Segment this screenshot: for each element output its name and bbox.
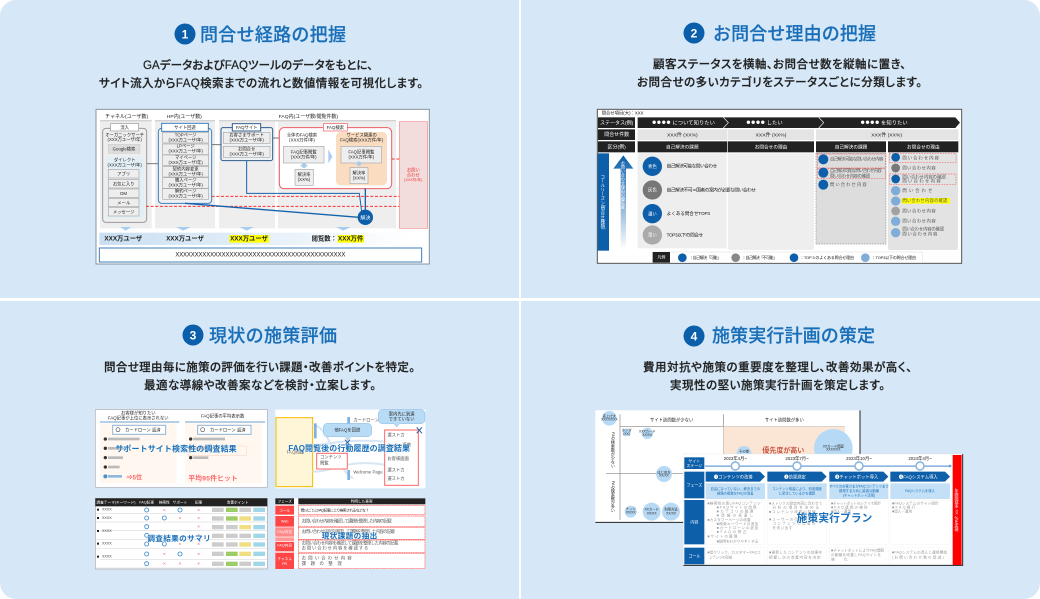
thumbnail: priority matrix: 利用方法: [664, 507, 678, 512]
thumbnail: priority matrix: XXXカード: [639, 428, 656, 433]
status matrix thumbnail: お問合せの理由: [907, 144, 940, 151]
thumbnail: action plan: ■検索性の高いFAQコンテンツ: [707, 500, 761, 505]
flow diagram thumbnail: 解決率: [298, 171, 311, 178]
flow diagram thumbnail: TOPページ: [175, 132, 197, 137]
status matrix thumbnail: XXX件 (XX%): [756, 131, 787, 138]
status matrix thumbnail: XXX件 (XX%): [667, 131, 698, 138]
status matrix thumbnail: 凡例: [657, 254, 665, 260]
status matrix thumbnail: 問合せ件数: [604, 131, 629, 138]
thumbnail: action plan: 2023年4月~: [724, 455, 747, 462]
status matrix thumbnail: コールリーズン(問合せ種類): [600, 174, 606, 230]
status matrix thumbnail: ：TOP 3 のよくある問合せ理由: [800, 254, 854, 260]
thumbnail: support site search survey: 平均95件ヒット: [188, 473, 238, 482]
flow diagram thumbnail: (XXX万ユーザ/年): [230, 137, 264, 144]
status matrix thumbnail: 問い合わせ: [902, 187, 932, 194]
flow diagram thumbnail: (XXX万件/年): [348, 153, 375, 160]
thumbnail: survey summary: 記事: [195, 500, 203, 505]
thumbnail: issue extraction: ゴール: [279, 507, 290, 512]
thumbnail: survey summary: XXXX: [102, 542, 112, 546]
thumbnail: issue extraction: FAQ内容: [277, 542, 292, 547]
status matrix thumbnail: 自己解決可能な問い合わせ内容: [830, 156, 884, 163]
thumbnail: survey summary: 調査結果のサマリ: [147, 533, 211, 543]
description 4: 実現性の堅い施策実行計画を策定します。: [670, 378, 885, 392]
status matrix thumbnail: 濃い: [648, 210, 657, 217]
status matrix thumbnail: 問い合わせ内容: [902, 230, 938, 237]
thumbnail: support site search survey: お客様が知りたい: [121, 409, 156, 416]
flow diagram thumbnail: LPページ: [177, 144, 195, 149]
thumbnail: support site search survey: カードローン 返済: [210, 426, 246, 433]
thumbnail: survey summary: 改善ポイント: [227, 500, 249, 505]
thumbnail: action plan: 把握し次の改善内容を決定: [769, 554, 821, 559]
thumbnail: survey summary: FAQ記事: [139, 500, 154, 505]
flow diagram thumbnail: (XXX件/年): [404, 177, 422, 182]
status matrix thumbnail: お問い合わせ理由の優先度: [621, 160, 626, 209]
thumbnail: behavior history survey: お客様画面: [387, 455, 410, 462]
flow diagram thumbnail: 流入: [120, 124, 130, 131]
description 1: サイト流入からFAQ検索までの流れと数値情報を可視化します。: [99, 76, 423, 90]
thumbnail: survey summary: ×: [179, 561, 182, 566]
status matrix thumbnail: 問い合わせ内容の確認: [902, 173, 946, 180]
flow diagram thumbnail: チャネル(ユーザ数): [105, 113, 149, 120]
thumbnail: action plan: 内容: [690, 519, 698, 525]
thumbnail: survey summary: サポート: [173, 500, 188, 505]
thumbnail: action plan: ■説明をわかりやすくする: [717, 538, 759, 543]
thumbnail: action plan: ■導入・運用: [831, 508, 851, 513]
flow diagram thumbnail: 解決: [360, 214, 370, 221]
thumbnail: priority matrix: XX/XX: [666, 511, 677, 515]
thumbnail: support site search survey: FAQ記事の平均表示数: [201, 412, 245, 419]
flow diagram thumbnail: ダイレクト: [114, 156, 135, 163]
thumbnail: action plan: ■更新したコンテンツの効果を: [769, 550, 823, 555]
status matrix thumbnail: 問い合わせ内容: [902, 164, 936, 171]
status matrix thumbnail: ●●●● を知りたい: [860, 118, 908, 127]
thumbnail: action plan: に変化しているかを確認: [779, 491, 816, 496]
thumbnail: action plan: ❶コンテンツの改善: [714, 473, 753, 480]
description 3: 最適な導線や改善案などを検討・立案します。: [144, 378, 376, 392]
heading 4: 4: [691, 330, 698, 344]
thumbnail: action plan: 施策実行プラン: [797, 512, 873, 525]
thumbnail: action plan: 2023年7月~: [785, 455, 809, 462]
flow diagram thumbnail: サイト回遊: [174, 124, 196, 131]
description 3: 問合せ理由毎に施策の評価を行い課題・改善ポイントを特定。: [104, 360, 415, 374]
status matrix thumbnail: ：自己解決「不可能」: [742, 254, 777, 260]
flow diagram thumbnail: (XXX万ユーザ/年): [230, 151, 264, 158]
thumbnail: action plan: ■FAQシステムのサイト設計: [892, 500, 939, 505]
status matrix thumbnail: ●●●● について知りたい: [652, 118, 715, 127]
status matrix thumbnail: 問い合わせ内容: [902, 218, 936, 225]
thumbnail: action plan: ❸チャットボット導入: [835, 473, 879, 480]
flow diagram thumbnail: お気に入り: [113, 180, 134, 187]
flow diagram thumbnail: Google検索: [113, 145, 136, 152]
thumbnail: issue extraction: お問い合わせ内容: [302, 555, 352, 562]
thumbnail: survey summary: ×: [197, 507, 200, 512]
thumbnail: action plan: ■カテゴリの整理: [717, 508, 754, 513]
thumbnail: action plan: コンテンツの改善点: [772, 520, 816, 525]
thumbnail: action plan: ■検索キーワードの追加: [717, 521, 759, 526]
flow diagram thumbnail: 合わせ: [407, 171, 420, 178]
flow diagram thumbnail: XXX万ユーザ: [230, 234, 269, 243]
flow diagram thumbnail: XXX万件: [338, 234, 364, 243]
thumbnail: priority matrix: サイト訪問数が少ない: [650, 417, 693, 424]
status matrix thumbnail: XXX件 (XX%): [871, 131, 902, 138]
thumbnail: action plan: [683, 454, 963, 565]
status matrix thumbnail: ：TOP3以下の問合せ理由: [872, 254, 916, 260]
flow diagram thumbnail: FAQ記事閲覧: [291, 148, 317, 155]
thumbnail: action plan: ■カスタマーページの改善: [707, 517, 751, 522]
description 4: [643, 360, 912, 392]
status matrix thumbnail: 問い合わせ内容の確認: [902, 226, 945, 233]
thumbnail: priority matrix: XX/XX: [642, 433, 653, 437]
status matrix thumbnail: TOP3以下の問合せ: [667, 232, 704, 239]
thumbnail: action plan: ❹FAQシステム導入: [899, 473, 938, 480]
thumbnail: behavior history survey: FAQ閲覧後の行動履歴の調査結果: [288, 443, 410, 453]
status matrix thumbnail: 薄い: [648, 232, 657, 238]
flow diagram thumbnail: HP内(ユーザ数): [167, 113, 202, 120]
thumbnail: action plan: ステージ: [686, 462, 702, 468]
flow diagram thumbnail: お問合せ: [238, 146, 255, 153]
flow diagram thumbnail: (XX%): [353, 175, 366, 180]
thumbnail: survey summary: ×: [197, 561, 200, 566]
flow diagram thumbnail: 解約ページ: [175, 188, 197, 195]
thumbnail: priority matrix: その他: [739, 448, 750, 453]
status matrix thumbnail: 自己解決可能な問い合わせ: [667, 163, 718, 170]
status matrix thumbnail: お問合せの理由: [755, 144, 788, 151]
thumbnail: behavior history survey: 遷ストカ: [387, 475, 405, 482]
panel 1: inquiry routes: [96, 24, 429, 264]
flow diagram thumbnail: (XXX万ユーザ/年): [169, 148, 203, 155]
thumbnail: behavior history survey: FAQ閲覧: [287, 449, 305, 456]
flow diagram thumbnail: FAQ内(ユーザ数/閲覧件数): [279, 113, 338, 120]
thumbnail: action plan: すべてのお客さまがFAQコンテンツまで: [829, 484, 889, 489]
thumbnail: issue extraction: 判明した事実: [351, 499, 373, 504]
flow diagram thumbnail: XXXXXXXXXXXXXXXXXXXXXXXXXXXXXXXXXXXXXXXXXXXX: [175, 253, 345, 259]
thumbnail: survey summary: 検索性: [159, 500, 170, 505]
flow diagram thumbnail: XXX万ユーザ: [104, 234, 143, 243]
thumbnail: action plan: 2024年4月~: [908, 455, 932, 462]
flow diagram thumbnail: FAQ検索: [327, 124, 345, 131]
plan thumbnails: [595, 410, 963, 565]
thumbnail: action plan: 誘導するために最適な動線: [839, 488, 880, 493]
thumbnail: issue extraction: お問い合わせ内容を確認して課題を整理した内容の記載: [302, 528, 396, 535]
description 2: お問合せの多いカテゴリをステータスごとに分類します。: [637, 75, 922, 89]
panel 3: current measures evaluation: [95, 324, 425, 569]
thumbnail: support site search survey: サポートサイト検索性の調査結果: [115, 444, 237, 454]
flow diagram thumbnail: アプリ: [117, 171, 130, 177]
thumbnail: survey summary: XXXX: [102, 529, 112, 533]
thumbnail: action plan: ■低クリック、カスタマーFAQコ: [707, 550, 761, 555]
thumbnail: support site search survey: FAQ記事が上位に表示されない: [108, 415, 169, 422]
thumbnail: priority matrix: (XX): [623, 432, 630, 436]
status matrix thumbnail: 区分(例): [608, 143, 626, 150]
thumbnail: action plan: ンテンツの完成: [709, 554, 733, 559]
heading 2: お問合せ理由の把握: [713, 24, 876, 44]
thumbnail: action plan: 自由になっていない、解決までの: [710, 486, 761, 491]
description 2: 顧客ステータスを横軸、お問合せ数を縦軸に置き、: [653, 57, 906, 71]
thumbnail: survey summary: ×: [197, 541, 200, 546]
thumbnail: behavior history survey: カードローン: [353, 418, 379, 424]
flow diagram thumbnail: 全体のFAQ検索: [287, 131, 318, 138]
status matrix thumbnail: 灰色: [648, 187, 657, 194]
status matrix thumbnail: 自己解決の課題: [666, 144, 699, 151]
thumbnail: behavior history survey: PayPay連携: [387, 442, 412, 449]
thumbnail: action plan: ■チャットボットのシナリオ設計: [831, 500, 881, 505]
flow diagram thumbnail: お問い: [407, 167, 420, 174]
flow diagram thumbnail: FAQ記事閲覧: [348, 148, 375, 155]
thumbnail: priority matrix: 売上げ大: [603, 413, 617, 418]
thumbnail: action plan: FAQシステムを導入: [905, 488, 936, 493]
thumbnail: priority matrix: XX/XX: [647, 511, 657, 515]
flow diagram thumbnail: (XX%): [298, 177, 311, 182]
heading 1: 1: [182, 28, 189, 42]
flow diagram thumbnail: 解決率: [353, 169, 366, 176]
thumbnail: issue extraction: Web: [281, 519, 288, 523]
status matrix thumbnail: [597, 109, 962, 263]
status matrix thumbnail: 問い合わせ内容: [902, 207, 936, 214]
flow diagram thumbnail: FAQ検索(XXX万件/年): [340, 136, 384, 143]
flow diagram thumbnail: (XXX万ユーザ/年): [108, 136, 142, 143]
flow diagram thumbnail: (XXX万ユーザ/年): [108, 161, 142, 168]
thumbnail: action plan: ■FAQサイトの改修: [717, 504, 757, 509]
thumbnail: support site search survey: [95, 409, 267, 487]
status matrix thumbnail: 自己解決可能な問い合わせ内容: [830, 167, 882, 174]
heading 4: 施策実行計画の策定: [712, 326, 875, 346]
status matrix thumbnail: 問い合わせ内容: [830, 181, 867, 188]
flow diagram thumbnail: (XXX万件/年): [289, 136, 315, 143]
heading 3: 3: [190, 328, 197, 342]
thumbnail: behavior history survey: 遷ストカ: [387, 467, 405, 474]
status matrix thumbnail: ●●●● したい: [746, 118, 783, 127]
thumbnail: action plan: フェーズ: [686, 481, 702, 487]
thumbnail: action plan: ■コンテンツ改修の評価: [769, 509, 816, 514]
description 2: [637, 57, 922, 89]
thumbnail: survey summary: [95, 498, 267, 569]
thumbnail: action plan: ❷効果測定: [784, 473, 806, 480]
description 4: 費用対抗や施策の重要度を整理し、改善効果が高く、: [643, 360, 912, 374]
thumbnail: survey summary: ×: [197, 533, 200, 538]
flow diagram thumbnail: (XXX万ユーザ/年): [169, 136, 203, 143]
flow diagram thumbnail: メッセージ: [113, 210, 135, 215]
thumbnail: priority matrix: はじめ方: [657, 469, 671, 474]
thumbnail: survey summary: ×: [163, 551, 166, 556]
status matrix thumbnail: ：自己解決「可能」: [689, 254, 721, 260]
thumbnail: issue extraction: お問い合わせ内容を確認する: [302, 545, 368, 552]
flow diagram thumbnail: 契約内容変更: [173, 165, 199, 172]
thumbnail: action plan: ■FAQシステムの導入と運用開始: [892, 550, 947, 555]
thumbnail: action plan: ■サイトの整理: [707, 534, 738, 539]
panel 4: action plan: [595, 326, 963, 565]
panel 2: inquiry reasons: [597, 22, 962, 263]
description 1: [99, 58, 423, 90]
status matrix thumbnail: 問い合わせ内容: [902, 178, 941, 185]
thumbnail: action plan: ■メトリクス設定内容に合わせて: [769, 500, 823, 505]
thumbnail: action plan: (お問い合わせ数の低減): [892, 554, 944, 559]
thumbnail: behavior history survey: コンテンツ: [320, 454, 342, 460]
thumbnail: priority matrix: サイト訪問数が多い: [765, 417, 804, 424]
flow diagram thumbnail: 購入ページ: [175, 177, 197, 184]
thumbnail: priority matrix: FAQ検索数が少ない: [611, 432, 616, 468]
thumbnail: issue extraction: 課題の整理: [302, 560, 342, 567]
thumbnail: priority matrix: ホンダ: [622, 428, 632, 433]
thumbnail: priority matrix: 優先度が高い: [762, 445, 804, 454]
thumbnail: priority matrix: [595, 410, 860, 522]
thumbnail: action plan: ■導線の見直し: [717, 512, 754, 517]
flow diagram thumbnail: (XXX万ユーザ/年): [169, 170, 203, 177]
thumbnail: action plan: 分析の項目を決める: [772, 504, 819, 509]
heading 3: 現状の施策評価: [209, 326, 337, 346]
thumbnail: issue extraction: フェーズ: [277, 499, 292, 504]
thumbnail: priority matrix: XXカード関連: [823, 443, 845, 448]
flow diagram thumbnail: (XXX万ユーザ/年): [169, 159, 203, 166]
thumbnail: survey summary: ×: [163, 507, 166, 512]
flow diagram thumbnail: XXX万ユーザ: [166, 234, 205, 243]
status matrix thumbnail: 問合せ項目(大)：XXX: [602, 110, 644, 117]
thumbnail: behavior history survey: [275, 410, 425, 488]
thumbnail: priority matrix: XXカード: [644, 507, 659, 512]
thumbnail: survey summary: ×: [197, 524, 200, 529]
thumbnail: issue extraction: 現状課題の抽出: [322, 530, 377, 540]
flow diagram thumbnail: FAQサイト: [236, 125, 257, 131]
thumbnail: action plan: (チャットボット活用): [843, 492, 875, 497]
thumbnail: action plan: を洗い出す: [772, 525, 793, 530]
thumbnail: priority matrix: XX/XX: [659, 474, 670, 478]
thumbnail: behavior history survey: 遷ストカ: [387, 432, 405, 439]
thumbnail: survey summary: ×: [163, 561, 166, 566]
status matrix thumbnail: 問い合わせ内容の確認: [830, 172, 871, 179]
thumbnail: action plan: 年間削減率 XX ％を実現: [954, 487, 959, 532]
status matrix thumbnail: 問い合わせ内容: [902, 154, 940, 161]
thumbnail: issue extraction: チャネル: [277, 556, 292, 561]
thumbnail: support site search survey: ⇒5位: [127, 473, 142, 481]
thumbnail: behavior history survey: 案内先に到達: [389, 410, 415, 417]
thumbnail: survey summary: ×: [197, 551, 200, 556]
status matrix thumbnail: ステータス(例): [600, 119, 634, 126]
thumbnail: action plan: 2023年10月~: [846, 455, 872, 462]
flow diagram thumbnail: オーガニックサーチ: [105, 131, 144, 138]
heading 1: 問合せ経路の把握: [200, 25, 346, 45]
thumbnail: survey summary: ×: [179, 541, 182, 546]
flow diagram thumbnail: (XXX万ユーザ/年): [169, 182, 203, 189]
flow diagram thumbnail: メール: [117, 200, 131, 205]
status matrix thumbnail: 青色: [648, 163, 657, 170]
thumbnail: issue extraction: [275, 498, 425, 569]
thumbnail: action plan: サイト: [688, 458, 700, 463]
evaluation thumbnails: [95, 409, 425, 569]
thumbnail: priority matrix: ナッジ: [626, 506, 636, 511]
flow diagram thumbnail: DM: [120, 191, 127, 196]
thumbnail: behavior history survey: できていない: [389, 416, 415, 422]
thumbnail: survey summary: XXXX: [102, 516, 112, 520]
thumbnail: support site search survey: カードローン 返済: [125, 426, 161, 433]
thumbnail: action plan: ゴール: [688, 552, 700, 558]
thumbnail: action plan: コンテンツ改善により、利用頻度: [772, 486, 823, 491]
thumbnail: issue extraction: PR: [282, 562, 288, 566]
thumbnail: issue extraction: FAQ内容: [277, 529, 292, 534]
thumbnail: action plan: ■チャットボットによりFAQ閲覧: [831, 548, 885, 553]
status matrix thumbnail: 問い合わせ内容の確認: [902, 197, 948, 204]
thumbnail: issue extraction: 問1-2ごとにFAQ記事に上り検索されるなどな？: [301, 507, 369, 512]
thumbnail: survey summary: ×: [197, 515, 200, 520]
flow diagram thumbnail: [96, 109, 429, 264]
status matrix thumbnail: 自己解決の課題: [835, 144, 868, 151]
thumbnail: behavior history survey: Welcome Page: [353, 469, 383, 474]
heading 2: 2: [691, 26, 698, 40]
thumbnail: priority matrix: XXXX/XXX: [601, 418, 618, 422]
status matrix thumbnail: 自己解決不可＝国者の案内が必要な問い合わせ: [667, 186, 756, 193]
description 3: [104, 360, 415, 392]
thumbnail: survey summary: ×: [179, 515, 182, 520]
thumbnail: action plan: 経路の複数なFAQの改善: [717, 491, 754, 496]
thumbnail: action plan: 強化: [831, 556, 848, 561]
thumbnail: action plan: ■FAQ連携の検討: [831, 504, 868, 509]
thumbnail: action plan: ■FAQ移行: [892, 504, 916, 509]
description 1: GAデータおよびFAQツールのデータをもとに、: [143, 58, 373, 72]
thumbnail: action plan: の動線を改善しFAQサイトを: [831, 552, 881, 557]
status matrix thumbnail: よくある問合せTOP3: [667, 210, 710, 217]
thumbnail: action plan: ■導入・運用: [892, 508, 912, 513]
thumbnail: priority matrix: FAQ検索数が多い: [611, 481, 616, 513]
flow diagram thumbnail: (XXX万ユーザ/年): [169, 193, 203, 200]
thumbnail: action plan: ■FAQの修正: [717, 529, 747, 534]
flow diagram thumbnail: 閲覧数：: [312, 234, 337, 243]
flow diagram thumbnail: マイページ: [175, 155, 197, 161]
thumbnail: survey summary: XXXX: [102, 555, 112, 559]
flow diagram thumbnail: お客さまサポート: [229, 132, 264, 139]
thumbnail: action plan: ■カードローンの追加: [717, 525, 759, 530]
flow diagram thumbnail: サービス関連の: [347, 131, 377, 138]
thumbnail: action plan: ■ユーザーの行動を分析: [769, 516, 816, 521]
thumbnail: priority matrix: XXXX/XX: [826, 448, 841, 452]
flow diagram thumbnail: (XXX万件/年): [291, 153, 317, 160]
thumbnail: behavior history survey: 他FAQを回遊: [334, 426, 361, 433]
thumbnail: issue extraction: お問い合わせ内容を確認して課題を整理した内容の記載: [302, 517, 392, 524]
thumbnail: priority matrix: XX/XX: [626, 510, 636, 514]
thumbnail: survey summary: XXXX: [102, 508, 112, 512]
thumbnail: behavior history survey: 閲覧: [320, 459, 329, 466]
thumbnail: issue extraction: お問い合わせ内容を確認して課題を整理した内容の記載: [302, 539, 399, 546]
thumbnail: survey summary: 調査テーマ(キーワード): [96, 500, 135, 505]
